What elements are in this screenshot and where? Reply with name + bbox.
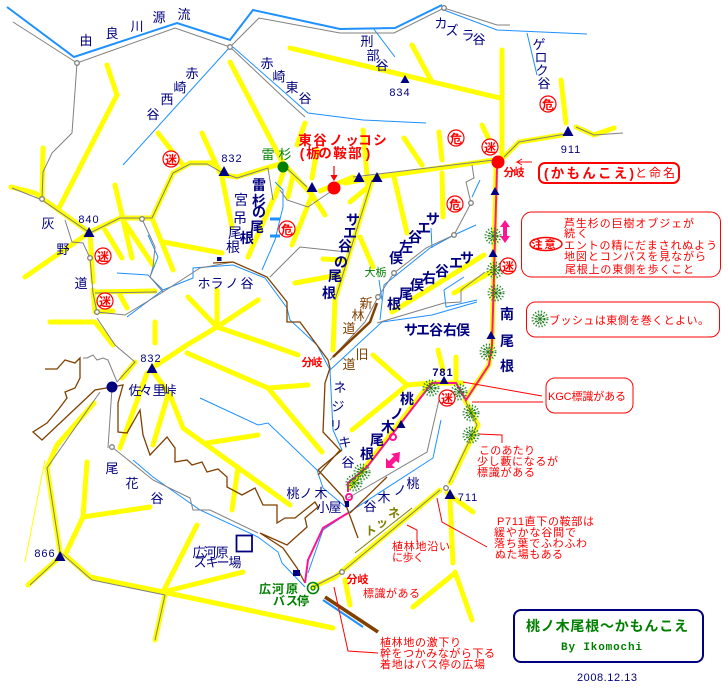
callout: bush note [526, 302, 720, 337]
note: thick bush: このあたり [479, 444, 535, 457]
warning markers: 迷 [502, 260, 514, 274]
arrow: pink double arrow [500, 220, 510, 243]
ridge names: 桃ノ木尾根 [360, 391, 414, 462]
callout: bush note: ブッシュは東側を巻くとよい。 [549, 313, 709, 327]
callout: caution: 続く [564, 226, 588, 240]
brown labels: forest roads [342, 296, 373, 372]
ridge names [226, 177, 514, 462]
ridge names: サエ谷の尾根 [322, 212, 360, 301]
logging roads: brown trails [33, 262, 387, 632]
callout: KGC marker [546, 378, 633, 413]
place labels: valleys: 尾花谷 [105, 461, 164, 506]
icon: grey junction rings [40, 6, 473, 574]
place labels: valleys [41, 7, 551, 570]
heading: noccoshi label: (栃の鞍部) [300, 145, 370, 161]
place labels: valleys: ゲロク谷 [532, 37, 551, 91]
note: marker at fork: 標識がある [363, 586, 420, 600]
date: 2008.12.13 [577, 672, 637, 684]
place labels: valleys: 佐々里峠 [128, 383, 177, 398]
olive label: net: トッネ [365, 506, 400, 538]
callout: caution: エントの精にだまされぬよう [564, 239, 717, 252]
place labels: valleys: カズラ谷 [434, 16, 486, 47]
place labels: valleys: 赤崎東谷 [260, 56, 312, 106]
elevation labels: 866 [34, 548, 56, 560]
warning markers: 危 [281, 222, 293, 237]
callout: kamonkoe name [539, 163, 679, 183]
note: steep descent: 着地はバス停の広場 [380, 657, 485, 671]
place labels: valleys: 由良川源流 [79, 7, 191, 48]
elevation labels: 840 [78, 214, 100, 226]
callout: KGC marker: KGC標識がある [548, 389, 626, 403]
warning markers: 危 [542, 97, 554, 112]
note: thick bush [477, 444, 558, 479]
place labels: valleys: 桃ノ木谷 [363, 476, 420, 514]
fork labels: 分岐 [504, 165, 524, 179]
place labels: valleys: ホラノ谷 [197, 276, 254, 291]
place labels: valleys: 赤崎西谷 [146, 66, 199, 122]
route: pink walked route [305, 168, 497, 583]
elevation labels: 832 [140, 353, 162, 365]
note: steep descent: 幹をつかみながら下る [380, 646, 495, 660]
callout: caution [522, 212, 720, 277]
icon: pass marker and huts [106, 257, 349, 576]
thin yellow line [25, 460, 45, 562]
callout: caution: 注意 [532, 237, 556, 251]
green labels [259, 147, 386, 608]
warning markers: 迷 [99, 295, 111, 309]
green labels: 雷杉 [261, 147, 292, 162]
ridge names: 宮吊尾根 [226, 192, 248, 255]
note: P711 saddle: 落ち葉でふわふわ [494, 536, 587, 550]
paths: grey roads [12, 8, 623, 640]
brown labels: forest roads: 旧道 [342, 347, 369, 372]
leader lines: red notes connectors [334, 382, 543, 653]
note: steep descent [380, 635, 495, 671]
rivers: blue streams [7, 5, 587, 627]
callout: caution: 地図とコンパスを見ながら [564, 249, 706, 263]
elevation labels: 911 [561, 144, 581, 156]
note: along plantation: に歩く [392, 550, 424, 564]
note: thick bush: 少し藪になるが [477, 454, 558, 468]
arrow: to kamonkoe [517, 159, 532, 165]
ridge names: 南尾根 [500, 306, 514, 374]
ridge names: 雷杉の尾根 [240, 177, 266, 246]
icon: summit triangles [54, 75, 574, 561]
note: P711 saddle: 緩やかな谷間で [494, 526, 576, 539]
olive planted forest line [355, 508, 412, 553]
fork labels: 分岐 [302, 355, 322, 369]
place labels: valleys: 広河原スキー場 [192, 545, 242, 570]
green labels: 大栃 [364, 265, 386, 279]
warning markers: 迷 [165, 153, 177, 167]
ridge names: サエ谷右俣尾根 [387, 250, 474, 312]
warning markers: 危 [450, 131, 462, 146]
place labels: valleys: 刑部谷 [360, 34, 389, 73]
elevation labels: 832 [221, 153, 243, 165]
note: thick bush: 標識がある [477, 465, 535, 479]
fork labels [302, 165, 524, 586]
place labels: valleys: 灰野道 [41, 216, 88, 291]
place labels: valleys: ネジリキ谷 [329, 380, 355, 470]
heading: noccoshi label: 東谷ノッコシ [298, 133, 387, 148]
place labels: valleys: 桃ノ木小屋 [286, 486, 342, 515]
arrow: pink diagonal arrow [386, 452, 400, 468]
warning markers: 迷 [97, 250, 109, 264]
elevation labels: 834 [389, 87, 411, 99]
note: along plantation: 植林地沿い [392, 539, 450, 553]
warning markers: 迷 [441, 392, 453, 406]
elevation labels: 781 [432, 367, 454, 379]
icon: red points [328, 156, 504, 194]
note: P711 saddle: P711直下の鞍部は [497, 514, 594, 528]
heading: noccoshi label [298, 133, 387, 161]
callout: caution: 芦生杉の巨樹オブジェが [564, 216, 694, 230]
title box: By Ikomochi [561, 642, 642, 654]
note: P711 saddle [494, 514, 594, 561]
callout: caution: 尾根上の東側を歩くこと [565, 262, 694, 276]
elevation labels [34, 87, 581, 560]
icon: bus stop [308, 582, 318, 594]
title box: 桃ノ木尾根～かもんこえ [526, 618, 688, 634]
callout: kamonkoe name: と命名 [635, 165, 675, 180]
callout: kamonkoe name: (かもんこえ) [544, 166, 634, 181]
note: P711 saddle: ぬた場もある [495, 548, 563, 561]
warning markers: 危 [449, 197, 461, 212]
elevation labels: 711 [458, 492, 478, 504]
title box [514, 610, 703, 662]
ridges: yellow ridge lines [11, 45, 614, 640]
arrow: to saddle [331, 166, 337, 180]
green labels: 広河原バス停 [259, 582, 309, 608]
warning markers: 迷 [484, 141, 496, 155]
note: steep descent: 植林地の激下り [380, 635, 461, 649]
icon: bushes [346, 228, 504, 490]
note: along plantation [392, 539, 450, 564]
icon: raisugi tree [278, 162, 288, 172]
ridge names: サエ谷右俣 [404, 322, 470, 338]
warning markers [95, 96, 556, 406]
brown labels: forest roads: 新林道 [342, 296, 373, 336]
ridge names: サエ谷左俣 [389, 211, 440, 266]
fork labels: 分岐 [346, 572, 368, 586]
